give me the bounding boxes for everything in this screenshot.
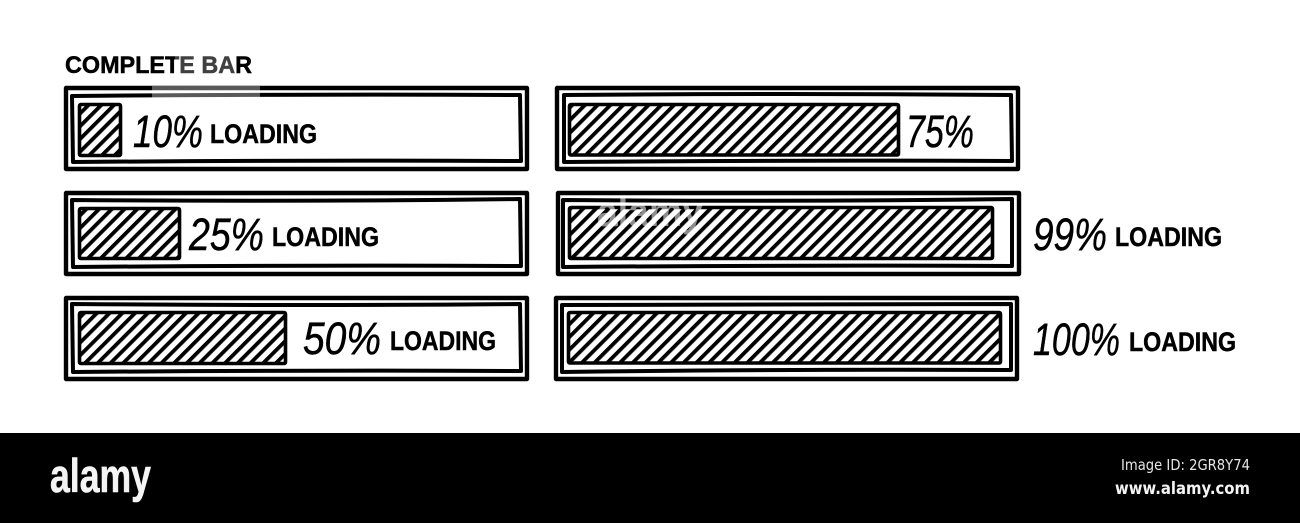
watermark: alamy ghost overlay xyxy=(152,53,704,235)
progress bar: 50%: 50% xyxy=(303,313,381,364)
progress bar: 10%: LOADING xyxy=(210,119,317,149)
title: COMPLETE BAR xyxy=(65,52,252,79)
progress bar: 99%: LOADING xyxy=(1115,222,1222,252)
progress bar: 50% xyxy=(66,298,527,379)
progress bar: 50%: LOADING xyxy=(390,326,496,356)
progress bar: 75%: 75% xyxy=(906,106,974,157)
watermark: alamy ghost overlay: alamy xyxy=(597,188,704,235)
footer text: image id: Image ID: 2GR8Y74 xyxy=(1121,456,1250,474)
footer band xyxy=(0,433,1300,523)
progress bar: 99%: 99% xyxy=(1033,209,1107,260)
progress bar: 99% xyxy=(558,193,1222,274)
progress bar: 10% xyxy=(66,88,527,169)
footer text: website: www.alamy.com xyxy=(1115,479,1250,498)
footer logo: alamy: alamy xyxy=(50,449,151,502)
progress bar: 25%: LOADING xyxy=(272,222,379,252)
progress bar: 100%: LOADING xyxy=(1129,327,1236,357)
progress bar: 25%: 25% xyxy=(188,209,264,260)
progress bar: 25% xyxy=(66,193,527,274)
progress bar: 10%: 10% xyxy=(133,106,203,157)
progress bar: 75% xyxy=(557,88,1018,169)
progress bar: 100%: 100% xyxy=(1033,314,1120,365)
progress bar: 100% xyxy=(556,298,1236,379)
